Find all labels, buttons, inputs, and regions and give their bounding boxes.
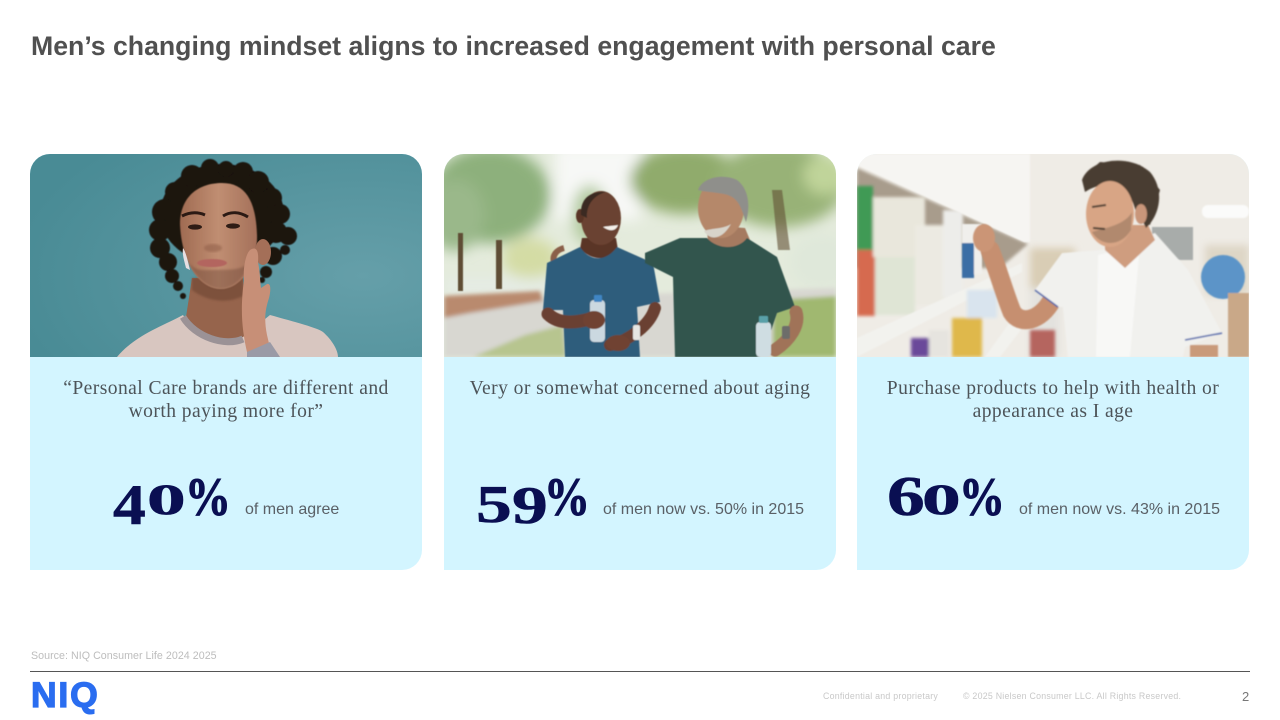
title: Men’s changing mindset aligns to increased engagement with personal care: [31, 31, 996, 61]
number label: of men now vs. 50% in 2015: [603, 501, 804, 518]
man in blue shirt: [543, 191, 660, 357]
man in green shirt: [645, 177, 797, 357]
big number: 59%: 5: [476, 476, 512, 534]
photo: young man applying cream: [30, 154, 422, 357]
page number: 2: [1242, 689, 1249, 704]
statement text: [63, 378, 389, 422]
panel: concerned about aging: [444, 154, 836, 570]
big number: 59%: [476, 467, 590, 535]
footer: confidentiality: Confidential and proprietary: [823, 691, 938, 701]
statement text: worth paying more for”: [129, 401, 323, 422]
big number: 40%: [113, 467, 231, 537]
footer: copyright: © 2025 Nielsen Consumer LLC. All Rights Reserved.: [963, 691, 1181, 701]
big number: 59%: 9: [512, 477, 548, 535]
panel: purchase products: [857, 154, 1249, 570]
big number: 60%: [887, 466, 1005, 528]
logo: NIQ: NIQ: [31, 675, 100, 715]
big number: 60%: 0: [922, 477, 961, 524]
hand: [242, 248, 280, 357]
big number: 40%: 4: [113, 474, 146, 537]
pharmacist: [973, 161, 1222, 357]
photo: man in pharmacy: [857, 154, 1249, 357]
statement text: “Personal Care brands are different and: [63, 378, 389, 399]
big number: 40%: 0: [147, 477, 186, 524]
number label: of men now vs. 43% in 2015: [1019, 501, 1220, 518]
big number: 59%: %: [544, 467, 590, 527]
photo: two men walking: [444, 154, 836, 357]
big number: 40%: %: [185, 467, 231, 527]
statement text: [887, 378, 1219, 422]
big number: 60%: 6: [887, 466, 925, 528]
statement text: appearance as I age: [973, 401, 1133, 422]
big number: 60%: %: [959, 467, 1005, 527]
sweater: [117, 315, 338, 357]
statement text: Purchase products to help with health or: [887, 378, 1219, 399]
panel: personal care brands: [30, 154, 422, 570]
number label: of men agree: [245, 501, 339, 518]
statement text: Very or somewhat concerned about aging: [470, 378, 810, 399]
source note: Source: NIQ Consumer Life 2024 2025: [31, 650, 217, 662]
